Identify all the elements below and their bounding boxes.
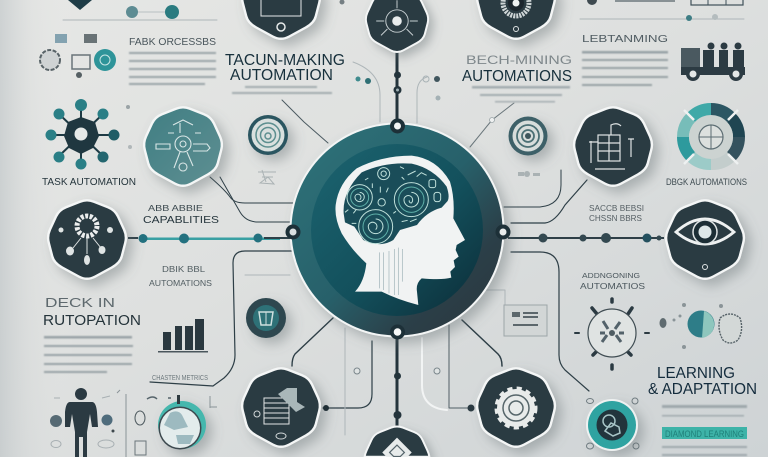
top edge details left (68, 0, 344, 19)
neck lines (380, 248, 402, 295)
heading: mining automations (462, 53, 572, 85)
node: left gear (48, 200, 126, 279)
icon: person side dots (50, 396, 114, 448)
faint icon left (258, 170, 276, 184)
text block: learning and adaptation (662, 405, 747, 456)
icon: teal orb and shell (660, 303, 742, 349)
heading: deck automation: DECK IN (45, 295, 115, 310)
brain (344, 163, 449, 244)
connector stud right (468, 404, 474, 412)
top edge details right (587, 0, 743, 21)
left teal connector (128, 234, 290, 244)
icon: teal badge (586, 398, 639, 451)
heading: mining automations: BECH-MINING (466, 53, 572, 67)
label: deck automations: DBGK AUTOMATIONS (666, 177, 747, 187)
label: add capabilities (143, 203, 219, 226)
heading: task process: FABK ORCESSBS (129, 37, 216, 48)
node: eye (666, 200, 744, 279)
icon: task automation hub (46, 99, 120, 170)
heading: learning and adaptation: LEARNING (657, 365, 735, 382)
node: bottom center (365, 426, 429, 457)
heading: learning mining: LEBTANMING (582, 33, 668, 45)
heading: learning and adaptation (648, 365, 757, 398)
text block: making automation (232, 86, 332, 94)
right connector (508, 233, 664, 243)
heading: making automation: AUTOMATION (230, 67, 333, 84)
heading: deck automation (43, 295, 141, 329)
label: left middle caption: AUTOMATIONS (149, 278, 212, 288)
small ring dots (354, 368, 440, 374)
heading: deck automation: RUTOPATION (43, 312, 141, 329)
label: add capabilities: ABB ABBIE (148, 203, 203, 213)
label: right middle caption: SACCB BEBSI (589, 203, 644, 213)
icon: radial wheel (575, 299, 649, 369)
bar chart (158, 319, 208, 352)
label: right middle caption: CHSSN BBRS (589, 214, 642, 223)
node: top center (366, 0, 428, 52)
central hub (286, 118, 510, 340)
label: left middle caption: DBIK BBL (162, 265, 206, 274)
heading: mining automations: AUTOMATIONS (462, 68, 572, 85)
node: top left (242, 0, 320, 39)
heading: making automation: TACUN-MAKING (225, 52, 345, 69)
icon: small gears cluster (40, 34, 116, 78)
text block: learning mining (582, 51, 668, 86)
label: agentic automations: ADDNGONING (582, 271, 640, 280)
icon: spiral button right (508, 116, 548, 156)
faint icon right (518, 171, 540, 177)
icon: spiral button left (248, 115, 288, 155)
icon: person (65, 388, 98, 457)
icon: glossy teal disc (158, 395, 206, 450)
label: agentic automations: AUTOMATIOS (580, 281, 645, 291)
text block: mining automations (472, 86, 570, 102)
node: teal concept (144, 107, 222, 186)
connector stud (323, 405, 329, 411)
label: left middle caption (149, 265, 212, 288)
panel: checklist node (242, 368, 320, 447)
hub disc (290, 122, 504, 338)
node: right factory (574, 107, 652, 186)
label: agentic automations (580, 271, 645, 291)
node: top right (477, 0, 555, 39)
callout: teal highlight: DIAMOND LEARNING (665, 429, 744, 439)
label: task automation: TASK AUTOMATION (42, 177, 136, 188)
label: right middle caption (589, 203, 644, 223)
icon: axis with small glyphs (117, 390, 217, 457)
label: add capabilities: CAPABLITIES (143, 214, 219, 226)
center vertical connector top (394, 50, 402, 125)
heading: learning and adaptation: & ADAPTATION (648, 381, 757, 398)
node: bottom right gear (477, 368, 555, 447)
chart: donut pie (677, 103, 745, 170)
heading: making automation (225, 52, 345, 84)
center vertical connector bottom (394, 335, 402, 430)
head silhouette (335, 156, 465, 305)
icon: truck with people (681, 42, 745, 81)
icon: circle button lower left (246, 298, 286, 338)
small wire dots (126, 76, 494, 149)
text block: task process (129, 52, 216, 85)
text block: deck automation (44, 336, 133, 373)
hub studs (286, 118, 510, 340)
label: bar chart caption: CHASTEN METRICS (152, 373, 208, 382)
faint screen panel (504, 305, 547, 336)
